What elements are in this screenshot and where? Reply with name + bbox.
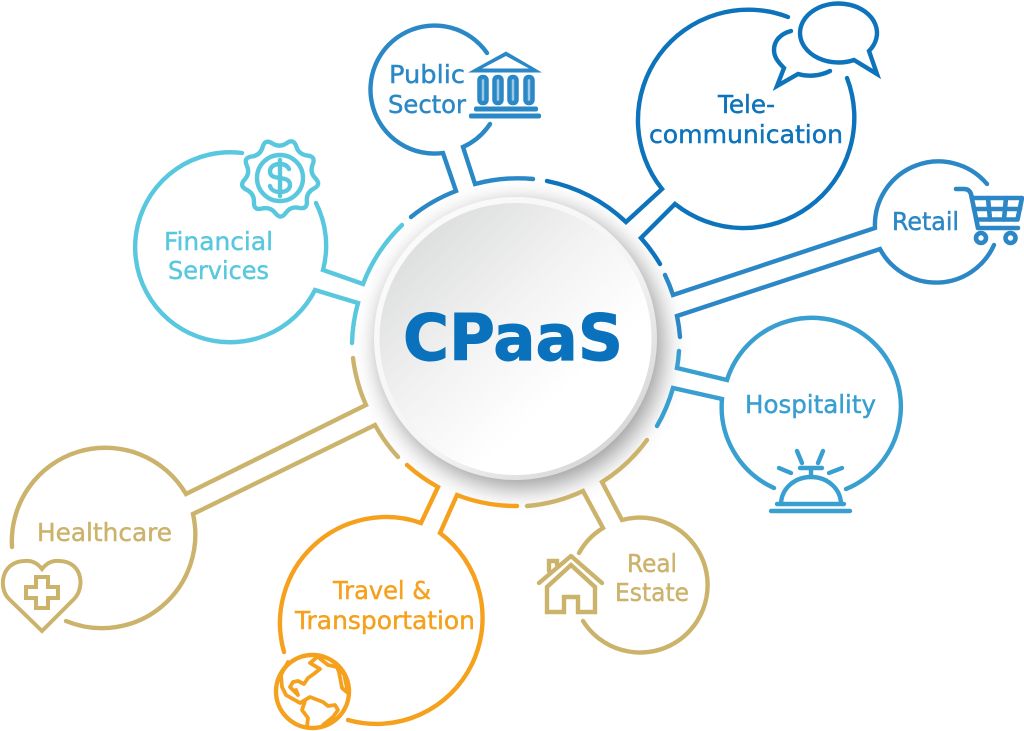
label: Real <box>627 549 677 578</box>
icon: heart with cross <box>3 561 80 631</box>
connector and circle outline <box>547 10 854 264</box>
icon: house <box>539 556 602 612</box>
label: Estate <box>615 578 689 607</box>
connector and circle outline <box>665 161 994 337</box>
panel: central CPaaS disc <box>374 197 663 488</box>
icon: bank building <box>468 52 542 118</box>
connector and circle outline <box>527 440 708 653</box>
connector and circle outline <box>135 152 402 343</box>
panel: Retail <box>665 161 1022 337</box>
icon: speech bubbles <box>774 3 877 86</box>
icon: service bell <box>771 451 850 511</box>
label: Public <box>389 60 465 89</box>
panel: Public Sector <box>370 26 542 217</box>
label: Sector <box>388 90 467 119</box>
icon: gear with dollar sign <box>242 141 318 217</box>
label: Hospitality <box>745 390 876 419</box>
panel: Financial Services <box>135 141 402 343</box>
label: Financial <box>164 227 273 256</box>
label: Retail <box>892 207 959 236</box>
label: Services <box>168 256 269 285</box>
label: Travel & <box>332 576 431 605</box>
label: communication <box>649 120 843 149</box>
panel: Healthcare <box>3 358 398 631</box>
panel: Real Estate <box>527 440 708 653</box>
connector and circle outline <box>657 318 901 489</box>
label: Transportation <box>294 606 475 635</box>
icon: shopping cart <box>956 189 1022 243</box>
title: CPaaS: CPaaS <box>403 302 623 376</box>
connector and circle outline <box>12 358 398 628</box>
connector and circle outline <box>280 465 517 724</box>
label: Tele- <box>717 90 775 119</box>
connector and circle outline <box>370 26 533 217</box>
icon: globe <box>276 655 349 728</box>
panel: Travel and Transportation <box>276 465 517 728</box>
panel: Telecommunication <box>547 3 877 264</box>
label: Healthcare <box>37 518 172 547</box>
panel: Hospitality <box>657 318 901 511</box>
